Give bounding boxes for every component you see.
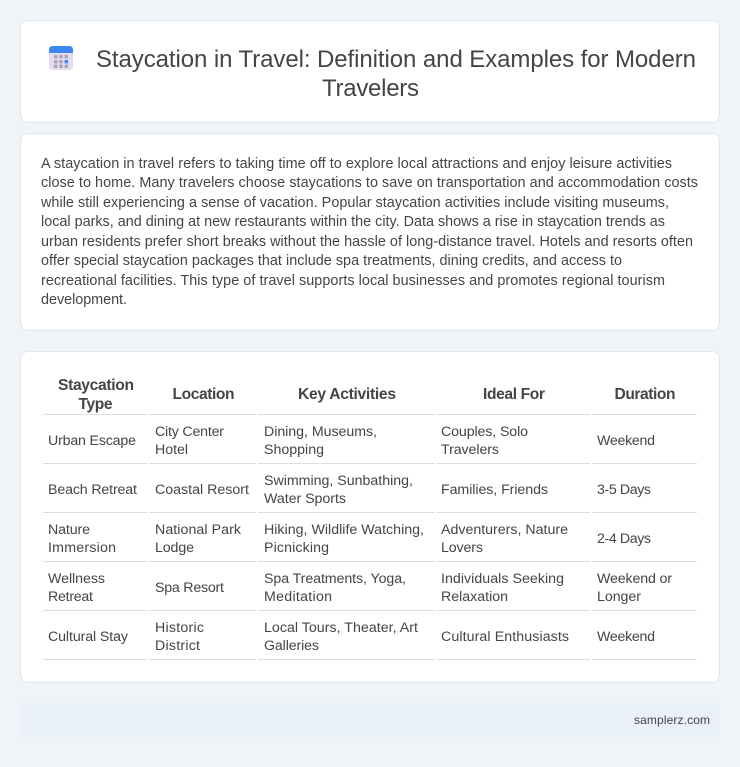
row: beach retreat: 3-5 Days bbox=[597, 482, 651, 498]
row: urban escape: Shopping bbox=[264, 442, 324, 458]
row: cultural stay: District bbox=[155, 638, 200, 654]
row: nature immersion: National Park bbox=[155, 522, 242, 538]
table rules bbox=[43, 414, 697, 660]
row: urban escape: Weekend bbox=[597, 433, 655, 449]
title: Travelers bbox=[322, 75, 419, 102]
row: nature immersion: Adventurers, Nature bbox=[441, 522, 568, 538]
row: wellness retreat: Weekend or bbox=[597, 571, 672, 587]
table bbox=[43, 377, 697, 660]
row: wellness retreat: Retreat bbox=[48, 589, 93, 605]
row: cultural stay: Galleries bbox=[264, 638, 319, 654]
row: urban escape: Dining, Museums, bbox=[264, 424, 377, 440]
row: wellness retreat bbox=[48, 571, 672, 605]
intro paragraph bbox=[40, 156, 698, 308]
row: nature immersion: Hiking, Wildlife Watching, bbox=[264, 522, 424, 538]
row: nature immersion: Lovers bbox=[441, 540, 483, 556]
table header: Staycation bbox=[58, 377, 134, 394]
row: nature immersion bbox=[48, 522, 651, 556]
row: nature immersion: Lodge bbox=[155, 540, 194, 556]
row: nature immersion: 2-4 Days bbox=[597, 531, 651, 547]
row: nature immersion: Nature bbox=[48, 522, 90, 538]
table header: Type bbox=[78, 396, 113, 413]
row: beach retreat: Swimming, Sunbathing, bbox=[264, 473, 413, 489]
row: beach retreat: Water Sports bbox=[264, 491, 346, 507]
row: wellness retreat: Wellness bbox=[48, 571, 105, 587]
row: urban escape: Urban Escape bbox=[48, 433, 136, 449]
row: wellness retreat: Spa Resort bbox=[155, 580, 224, 596]
header card bbox=[20, 20, 720, 123]
table header: Ideal For bbox=[483, 386, 545, 403]
intro paragraph: offer special staycation packages that include spa treatments, dining credits, and access to bbox=[41, 253, 622, 269]
row: urban escape: Travelers bbox=[441, 442, 499, 458]
row: cultural stay: Local Tours, Theater, Art bbox=[264, 620, 418, 636]
row: beach retreat: Families, Friends bbox=[441, 482, 548, 498]
row: wellness retreat: Spa Treatments, Yoga, bbox=[264, 571, 406, 587]
row: urban escape bbox=[48, 424, 655, 458]
row: urban escape: City Center bbox=[155, 424, 224, 440]
footer source: samplerz.com bbox=[634, 713, 710, 727]
intro paragraph: A staycation in travel refers to taking time off to explore local attractions and enjoy leisure activities bbox=[41, 156, 672, 172]
row: urban escape: Hotel bbox=[155, 442, 188, 458]
row: wellness retreat: Relaxation bbox=[441, 589, 508, 605]
table header: Location bbox=[172, 386, 234, 403]
row: beach retreat: Coastal Resort bbox=[155, 482, 249, 498]
intro paragraph: while still experiencing a sense of vacation. Popular staycation activities include visiting museums, bbox=[40, 195, 669, 211]
row: urban escape: Couples, Solo bbox=[441, 424, 528, 440]
row: cultural stay: Cultural Enthusiasts bbox=[441, 629, 569, 645]
table header: Duration bbox=[614, 386, 676, 403]
intro paragraph: local parks, and dining at new restaurants within the city. Data shows a rise in staycation trends as bbox=[41, 214, 665, 230]
intro paragraph: recreational facilities. This type of travel supports local businesses and promotes regional tourism bbox=[41, 273, 665, 289]
table card bbox=[20, 351, 720, 683]
row: cultural stay: Historic bbox=[155, 620, 204, 636]
icon: calendar bbox=[49, 46, 73, 70]
intro paragraph: development. bbox=[41, 292, 127, 308]
row: cultural stay: Weekend bbox=[597, 629, 655, 645]
title: Staycation in Travel: Definition and Examples for Modern bbox=[96, 46, 696, 73]
row: nature immersion: Immersion bbox=[48, 540, 116, 556]
row: beach retreat bbox=[48, 473, 651, 507]
row: beach retreat: Beach Retreat bbox=[48, 482, 137, 498]
footer band bbox=[20, 703, 720, 737]
row: cultural stay bbox=[48, 620, 655, 654]
table header: Key Activities bbox=[298, 386, 396, 403]
row: wellness retreat: Longer bbox=[597, 589, 641, 605]
intro paragraph: close to home. Many travelers choose staycations to save on transportation and accommodation costs bbox=[41, 175, 698, 191]
row: cultural stay: Cultural Stay bbox=[48, 629, 129, 645]
table header bbox=[58, 377, 676, 413]
intro card bbox=[20, 133, 720, 331]
title bbox=[96, 46, 696, 102]
intro paragraph: urban residents prefer short breaks without the hassle of long-distance travel. Hotels and resorts often bbox=[41, 234, 693, 250]
row: wellness retreat: Individuals Seeking bbox=[441, 571, 564, 587]
row: nature immersion: Picnicking bbox=[264, 540, 329, 556]
row: wellness retreat: Meditation bbox=[264, 589, 332, 605]
